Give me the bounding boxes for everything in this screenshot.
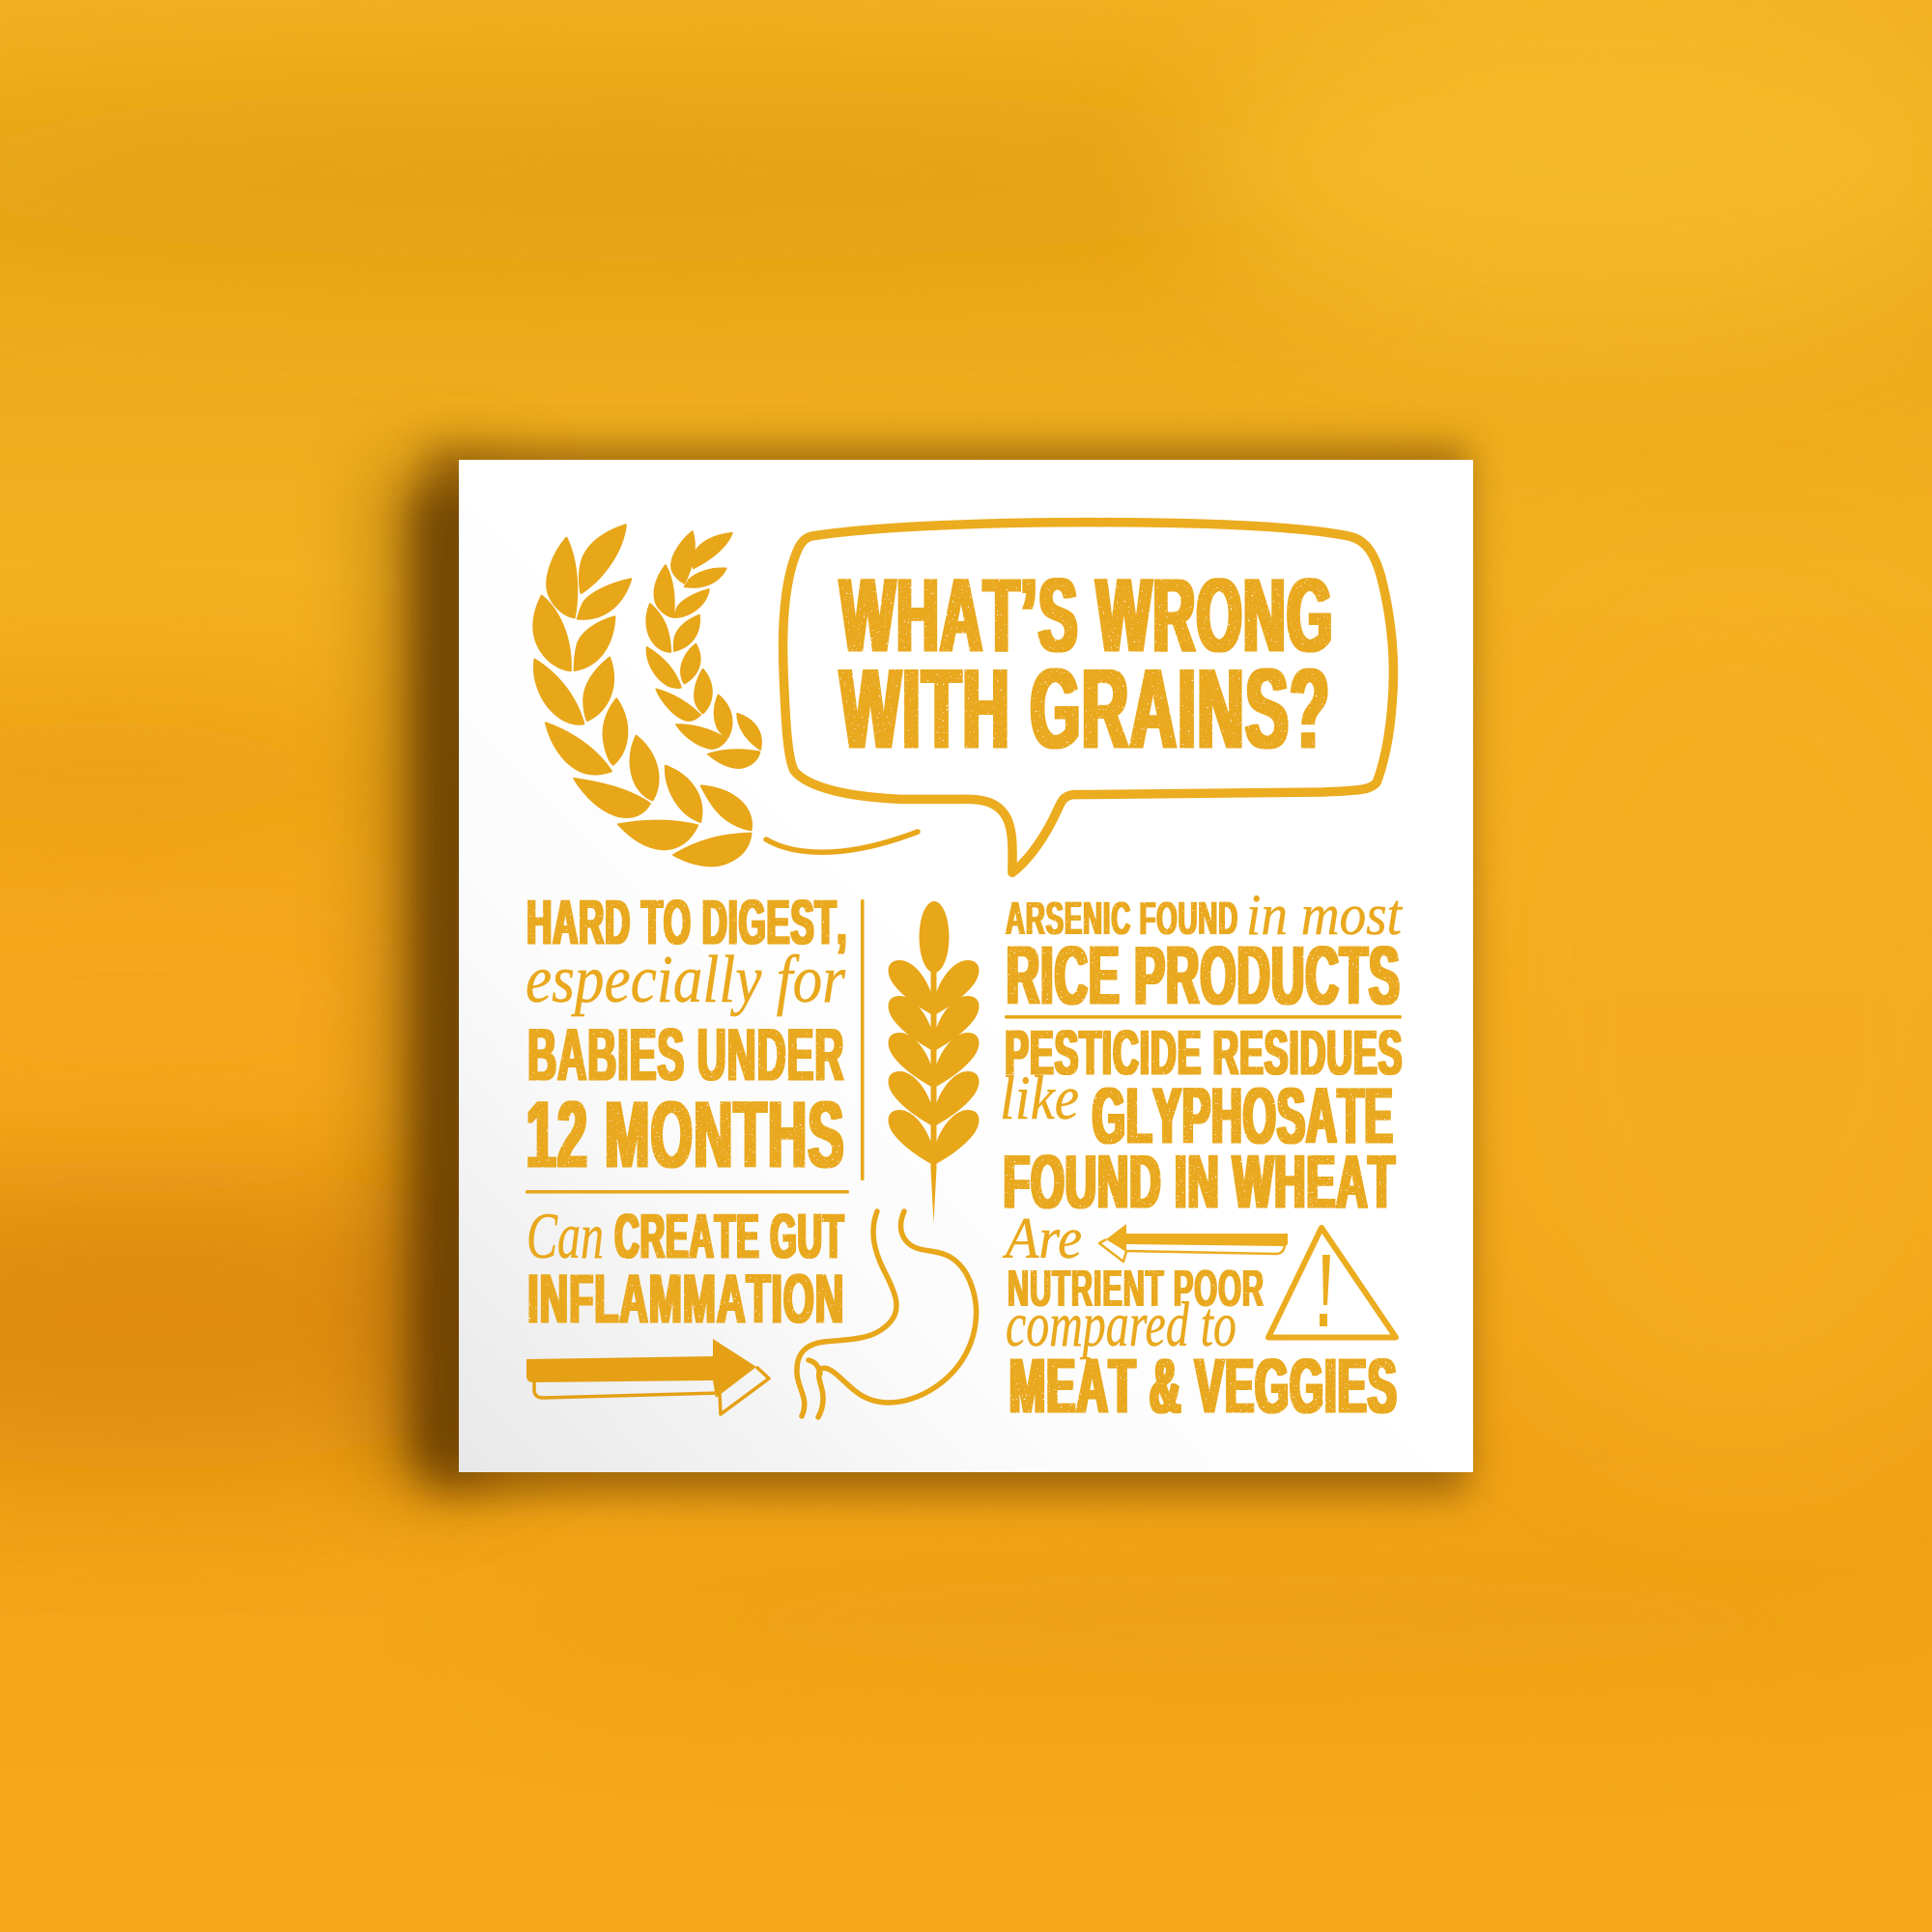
text block: nutrient poor: compared to [1006, 1290, 1236, 1360]
text block: gut inflammation: INFLAMMATION [527, 1262, 844, 1338]
divider: right horizontal rule [1005, 1015, 1402, 1018]
icon: small wheat sprig [646, 531, 761, 768]
text block: arsenic in rice: in most [1246, 883, 1403, 947]
icon: large wheat sprig [533, 525, 752, 866]
speech bubble tail line [766, 832, 918, 852]
text block: gut inflammation: CREATE GUT [614, 1201, 844, 1271]
text block: gut inflammation [526, 1199, 844, 1338]
text block: hard to digest: especially for [526, 943, 846, 1017]
icon: central wheat stalk [889, 901, 979, 1223]
divider: left horizontal rule [526, 1190, 849, 1194]
title [840, 556, 1334, 772]
text block: hard to digest [526, 887, 847, 1187]
title: WHAT’S WRONG [840, 556, 1334, 673]
text block: arsenic in rice: RICE PRODUCTS [1007, 930, 1401, 1022]
arrow pointing right [526, 1339, 769, 1414]
text block: hard to digest: HARD TO DIGEST, [526, 887, 847, 957]
text block: arsenic in rice: ARSENIC FOUND [1006, 894, 1238, 945]
text block: pesticide residues: GLYPHOSATE [1093, 1072, 1394, 1160]
icon: warning triangle [1268, 1228, 1396, 1337]
text block: nutrient poor: MEAT & VEGGIES [1009, 1343, 1398, 1429]
panel: white card [459, 460, 1473, 1472]
text block: nutrient poor: NUTRIENT POOR [1008, 1260, 1264, 1318]
text block: pesticide residues: FOUND IN WHEAT [1004, 1139, 1396, 1224]
text block: pesticide residues [1000, 1017, 1403, 1224]
text block: gut inflammation: Can [526, 1199, 604, 1272]
text block: pesticide residues: PESTICIDE RESIDUES [1005, 1017, 1403, 1088]
speech bubble outline [783, 523, 1393, 872]
divider: vertical rule [861, 899, 864, 1180]
arrow pointing left [1099, 1224, 1288, 1262]
text block: pesticide residues: like [1000, 1064, 1079, 1133]
title: WITH GRAINS? [840, 645, 1331, 772]
icon: stomach [797, 1211, 977, 1417]
text block: arsenic in rice [1006, 883, 1403, 1022]
card shadow [377, 446, 1468, 1494]
text block: hard to digest: BABIES UNDER [527, 1014, 844, 1096]
text block: nutrient poor [1006, 1260, 1398, 1429]
text block: hard to digest: 12 MONTHS [526, 1082, 845, 1187]
text: are: Are [1002, 1207, 1082, 1270]
